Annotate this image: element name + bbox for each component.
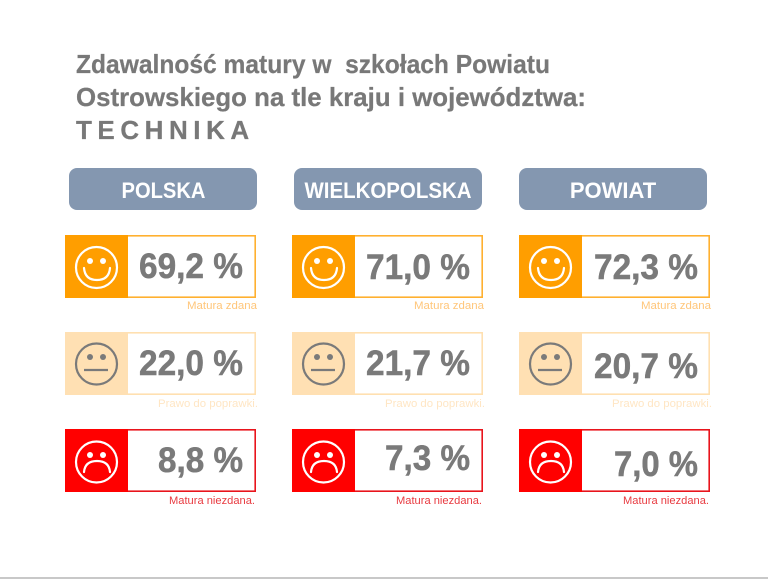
- card: Powiat matura zdana: [519, 235, 712, 312]
- card: Polska prawo do poprawki: Prawo do poprawki.: [158, 398, 258, 410]
- card: Wielkopolska matura zdana: Matura zdana: [414, 300, 485, 312]
- card: Polska matura niezdana: Matura niezdana.: [169, 495, 255, 507]
- heading: Wielkopolska: [294, 168, 482, 210]
- heading: Polska: POLSKA: [122, 178, 206, 203]
- heading: Powiat: [519, 168, 707, 210]
- title: TECHNIKA: [76, 115, 255, 145]
- card: Wielkopolska matura zdana: [292, 235, 485, 312]
- card: Powiat prawo do poprawki: [519, 332, 712, 410]
- card: Wielkopolska matura niezdana: 7,3 %: [385, 439, 470, 478]
- card: Powiat matura zdana: 72,3 %: [594, 248, 698, 287]
- card: Powiat matura niezdana: Matura niezdana.: [623, 495, 709, 507]
- card: Polska prawo do poprawki: [65, 332, 258, 410]
- title: Zdawalność matury w szkołach Powiatu: [76, 49, 550, 79]
- panel: Wielkopolska: [292, 168, 485, 507]
- card: Powiat prawo do poprawki: 20,7 %: [594, 347, 698, 386]
- title: [76, 49, 586, 145]
- card: Polska matura niezdana: 8,8 %: [158, 441, 243, 480]
- card: Polska matura zdana: [65, 235, 258, 312]
- card: Wielkopolska matura niezdana: [292, 429, 482, 507]
- heading: Polska: [69, 168, 257, 210]
- panel: Polska: [65, 168, 258, 507]
- card: Wielkopolska prawo do poprawki: 21,7 %: [366, 344, 470, 383]
- card: Polska matura zdana: Matura zdana: [187, 300, 258, 312]
- card: Wielkopolska prawo do poprawki: Prawo do poprawki.: [385, 398, 485, 410]
- card: Wielkopolska matura zdana: 71,0 %: [366, 248, 470, 287]
- heading: Powiat: POWIAT: [570, 178, 657, 203]
- card: Wielkopolska matura niezdana: Matura niezdana.: [396, 495, 482, 507]
- card: Polska matura niezdana: [65, 429, 255, 507]
- heading: Wielkopolska: WIELKOPOLSKA: [304, 178, 472, 203]
- card: Wielkopolska prawo do poprawki: [292, 332, 485, 410]
- card: Powiat matura zdana: Matura zdana: [641, 300, 712, 312]
- card: Powiat matura niezdana: [519, 429, 709, 507]
- panel: Powiat: [519, 168, 712, 507]
- card: Powiat prawo do poprawki: Prawo do poprawki.: [612, 398, 712, 410]
- card: Powiat matura niezdana: 7,0 %: [614, 445, 698, 484]
- title: Ostrowskiego na tle kraju i województwa:: [76, 82, 586, 112]
- card: Polska prawo do poprawki: 22,0 %: [139, 344, 243, 383]
- card: Polska matura zdana: 69,2 %: [139, 247, 243, 286]
